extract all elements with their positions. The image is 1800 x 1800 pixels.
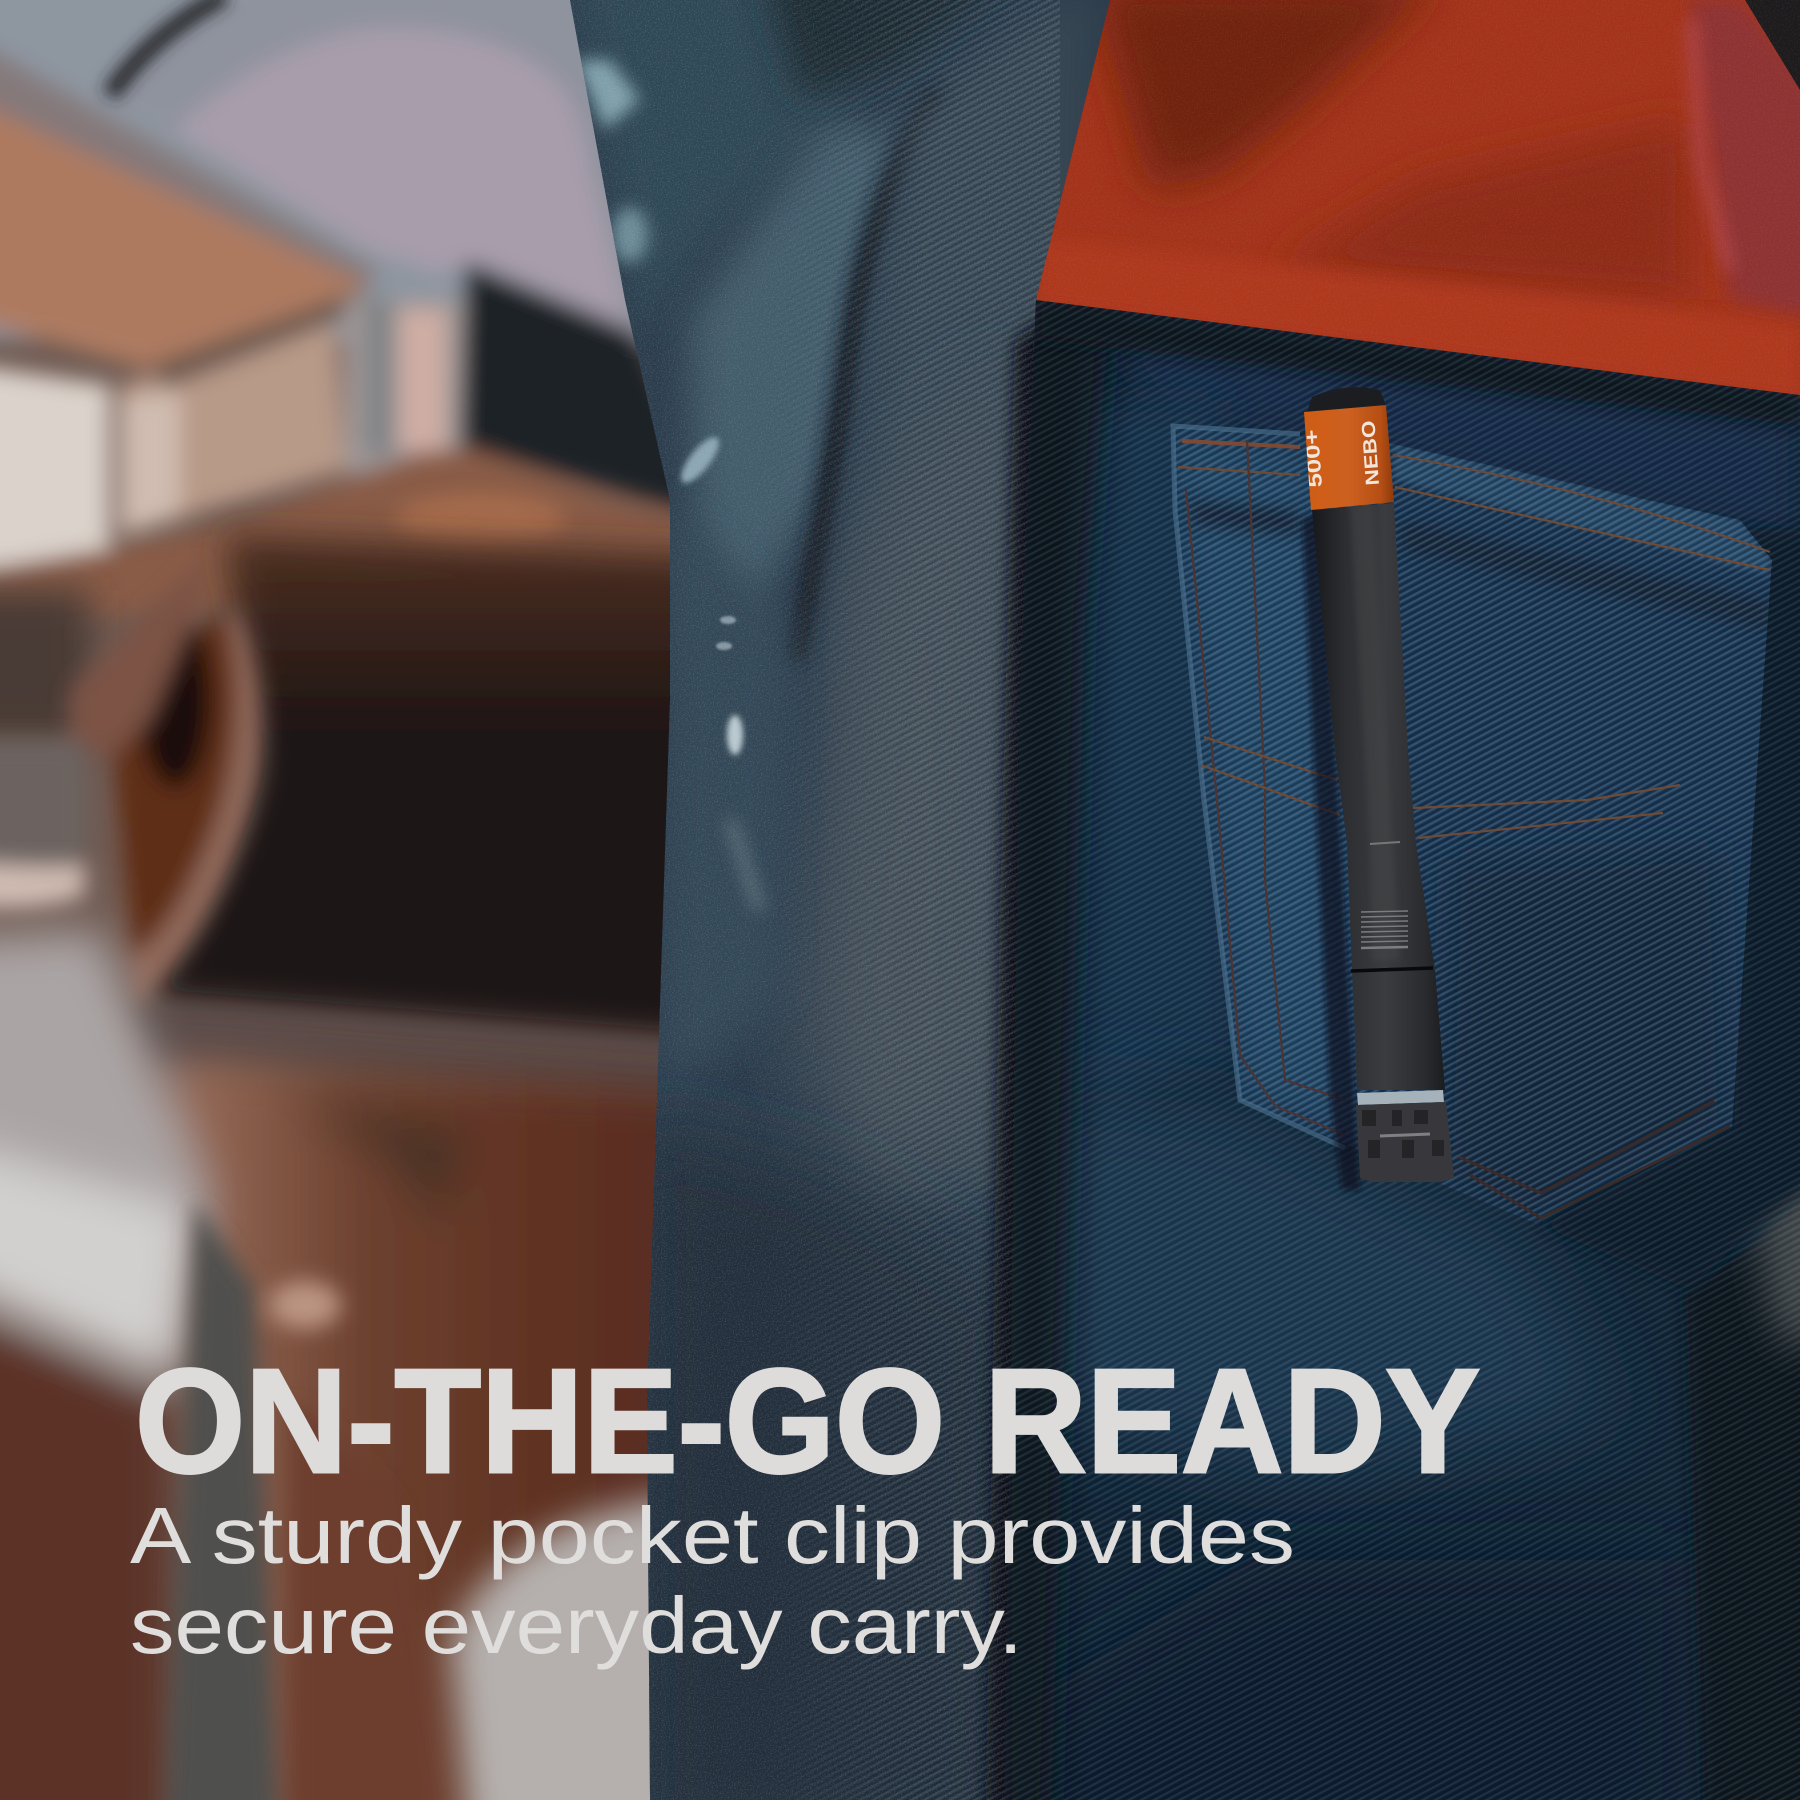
right of fold dark <box>1685 1180 1800 1800</box>
shadow <box>1302 510 1360 1190</box>
right of pocket dark <box>1540 530 1800 1290</box>
background: blurred workshop shelves <box>0 0 720 1800</box>
lavender panel <box>175 28 630 325</box>
body <box>1312 503 1445 1090</box>
step highlight <box>1370 842 1400 844</box>
hem <box>1036 240 1800 400</box>
back pocket <box>1170 425 1780 1235</box>
mid left leg <box>660 500 790 1100</box>
rust strap <box>70 560 205 760</box>
rust lump <box>290 1400 460 1800</box>
subtitle <box>130 1491 1295 1670</box>
crate <box>120 325 345 535</box>
jeans: right leg <box>1000 290 1800 1800</box>
jeans: left leg <box>560 0 1120 1800</box>
upper left denim <box>1072 396 1232 1085</box>
lower shelf lip <box>125 1000 720 1100</box>
lit hip <box>1030 1080 1620 1480</box>
pale box left <box>0 360 110 590</box>
strap grey end <box>0 590 90 740</box>
peach shelf underside <box>0 85 370 370</box>
band lettering <box>1301 420 1384 488</box>
gutter shadow <box>977 315 1035 1800</box>
hem shade <box>1190 500 1300 535</box>
dark fold top <box>760 0 1020 100</box>
500+ mark: 500+ <box>1301 429 1327 488</box>
dark fold <box>1090 0 1440 190</box>
right panel of leg <box>866 6 1086 1193</box>
threads <box>1361 911 1408 948</box>
grey wall <box>0 0 720 340</box>
red shirt <box>1030 0 1800 400</box>
shelf rim <box>0 20 375 290</box>
dark smudge on crate <box>290 1100 470 1220</box>
bottom left brown <box>0 1295 170 1800</box>
hem light <box>1393 444 1772 575</box>
pink flap <box>1690 0 1800 320</box>
dark crease <box>795 90 940 660</box>
pocket stitches <box>1178 440 1770 1218</box>
subtitle line 1: A sturdy pocket clip provides <box>130 1491 1295 1580</box>
orange band <box>1304 405 1394 510</box>
lower shade <box>647 1130 992 1800</box>
heading: ON-THE-GO READY <box>135 1339 1480 1504</box>
roll rim <box>110 610 260 1010</box>
roll dark hollow <box>139 612 211 788</box>
left midsection <box>0 740 85 880</box>
arch dark edge <box>110 0 225 95</box>
bezel <box>1356 1102 1454 1182</box>
arch ring <box>110 0 650 340</box>
peach lump <box>269 1281 341 1329</box>
lower brown crate <box>170 1060 720 1800</box>
white lump <box>450 1490 720 1800</box>
flashlight <box>1301 387 1454 1190</box>
pole <box>165 1200 280 1800</box>
shaded centre <box>1270 120 1690 300</box>
metal post <box>345 300 465 475</box>
dark box <box>460 262 720 520</box>
upper blurred denim <box>573 0 813 284</box>
shadow under shirt <box>1036 300 1800 425</box>
brown and dark bag <box>140 535 720 1045</box>
crate beam <box>150 290 365 390</box>
grey-white panel <box>0 930 205 1370</box>
brand NEBO: NEBO <box>1359 420 1384 486</box>
shaded left strip <box>1000 300 1110 1800</box>
light ring <box>1357 1090 1444 1105</box>
pocket edge <box>1173 426 1345 1148</box>
end cap <box>1306 387 1386 415</box>
dust band <box>788 468 992 1154</box>
dark corner <box>1745 0 1800 90</box>
pocket lower right shaded <box>1440 850 1730 1225</box>
upper band below shirt <box>1128 354 1800 526</box>
lower dark <box>1077 1578 1676 1794</box>
pocket lit left <box>1170 430 1350 1130</box>
teal splotches <box>575 60 640 130</box>
groove <box>1351 968 1433 971</box>
second shelf top <box>0 448 720 630</box>
subtitle line 2: secure everyday carry. <box>130 1581 1023 1670</box>
roll interior <box>110 610 236 960</box>
